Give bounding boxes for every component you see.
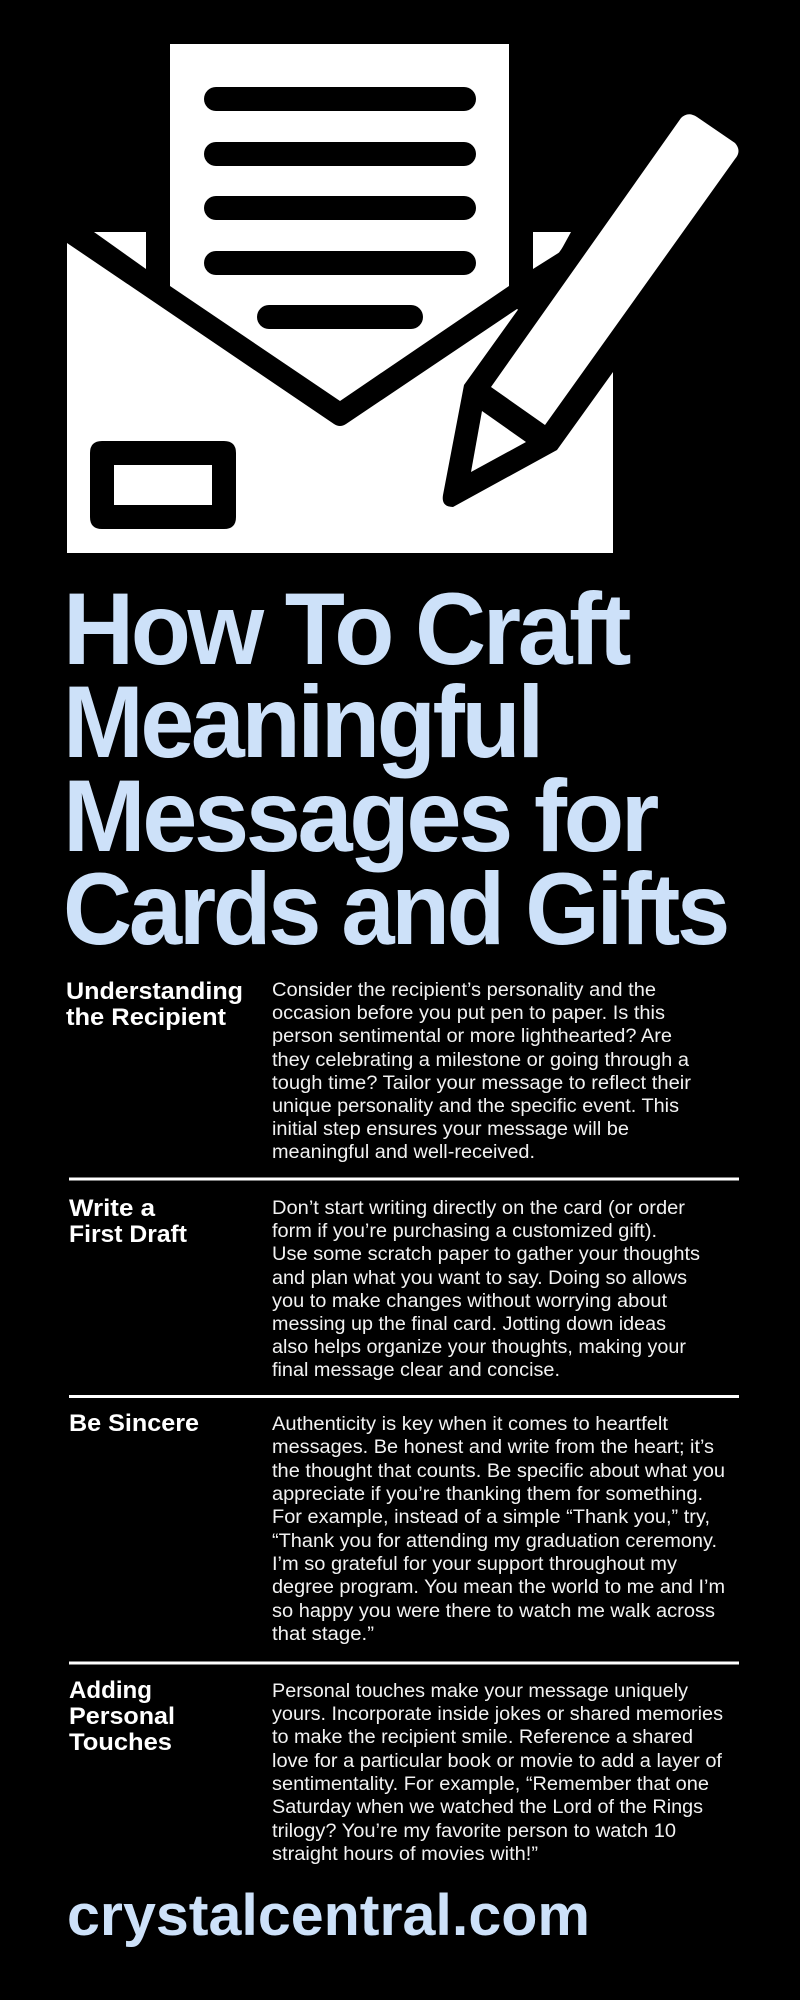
text block: first draft: also helps organize your thoughts, making your [272, 1337, 687, 1358]
address label on envelope [90, 441, 236, 529]
text block: recipient: meaningful and well-received. [272, 1142, 535, 1163]
text block: sincere: so happy you were there to watch me walk across [272, 1601, 715, 1622]
text block: recipient: person sentimental or more lighthearted? Are [272, 1026, 672, 1047]
envelope right flap corner [533, 232, 571, 269]
title: Meaningful [63, 665, 541, 779]
text block: first draft: Don’t start writing directly on the card (or order [272, 1198, 686, 1219]
heading: Write a First Draft [69, 1195, 187, 1248]
text block: first draft: form if you’re purchasing a customized gift). [272, 1221, 657, 1242]
title: How To Craft [63, 572, 630, 686]
text block: personal touches: love for a particular book or movie to add a layer of [272, 1751, 723, 1772]
heading: Be Sincere: Be Sincere [69, 1410, 199, 1437]
heading: Understanding the Recipient: Understanding [66, 978, 243, 1005]
text block: sincere: the thought that counts. Be specific about what you [272, 1461, 725, 1482]
pen outline [443, 70, 790, 507]
section: Write a First Draft [69, 1195, 700, 1381]
text block: recipient: Consider the recipient’s personality and the [272, 980, 656, 1001]
text block: recipient: unique personality and the specific event. This [272, 1096, 679, 1117]
text block: sincere: appreciate if you’re thanking them for something. [272, 1484, 703, 1505]
text block: personal touches [272, 1681, 723, 1865]
section: Adding Personal Touches [69, 1677, 723, 1865]
text block: recipient: they celebrating a milestone or going through a [272, 1050, 689, 1071]
text block: sincere: that stage.” [272, 1624, 374, 1645]
title: Cards and Gifts [63, 852, 727, 966]
text block: sincere: Authenticity is key when it comes to heartfelt [272, 1414, 669, 1435]
text block: first draft: you to make changes without worrying about [272, 1291, 668, 1312]
section: Understanding the Recipient [66, 978, 692, 1163]
text block: sincere: degree program. You mean the world to me and I’m [272, 1577, 725, 1598]
text block: first draft [272, 1198, 700, 1381]
text block: sincere: I’m so grateful for your support throughout my [272, 1554, 678, 1575]
heading: Adding Personal Touches: Personal [69, 1703, 175, 1730]
section: Be Sincere [69, 1410, 725, 1645]
envelope body [67, 243, 613, 553]
heading: Understanding the Recipient: the Recipient [66, 1004, 226, 1031]
website url: crystalcentral.com [67, 1883, 590, 1948]
icon: envelope with letter and pen [67, 44, 790, 553]
text block: personal touches: trilogy? You’re my favorite person to watch 10 [272, 1821, 676, 1842]
text block: recipient: tough time? Tailor your message to reflect their [272, 1073, 692, 1094]
text block: personal touches: to make the recipient smile. Reference a shared [272, 1727, 693, 1748]
text block: first draft: final message clear and concise. [272, 1360, 560, 1381]
pen body [491, 114, 738, 425]
text block: personal touches: straight hours of movies with!” [272, 1844, 538, 1865]
heading: Adding Personal Touches: Touches [69, 1729, 172, 1756]
text block: sincere: “Thank you for attending my graduation ceremony. [272, 1531, 717, 1552]
heading: Understanding the Recipient [66, 978, 243, 1031]
text block: personal touches: sentimentality. For example, “Remember that one [272, 1774, 709, 1795]
text block: sincere [272, 1414, 725, 1645]
heading: Adding Personal Touches [69, 1677, 175, 1756]
text block: personal touches: Personal touches make your message uniquely [272, 1681, 689, 1702]
title: Messages for [63, 759, 659, 873]
text block: sincere: For example, instead of a simple “Thank you,” try, [272, 1507, 710, 1528]
heading: Write a First Draft: First Draft [69, 1221, 187, 1248]
letter text lines [204, 87, 476, 329]
text block: personal touches: Saturday when we watched the Lord of the Rings [272, 1797, 703, 1818]
heading: Adding Personal Touches: Adding [69, 1677, 152, 1704]
text block: first draft: messing up the final card. Jotting down ideas [272, 1314, 666, 1335]
heading: Write a First Draft: Write a [69, 1195, 156, 1222]
text block: recipient [272, 980, 692, 1163]
text block: personal touches: yours. Incorporate inside jokes or shared memories [272, 1704, 723, 1725]
title [63, 572, 727, 966]
text block: sincere: messages. Be honest and write from the heart; it’s [272, 1437, 714, 1458]
envelope left flap corner [94, 232, 146, 269]
text block: first draft: Use some scratch paper to gather your thoughts [272, 1244, 700, 1265]
letter paper [170, 44, 509, 401]
text block: recipient: initial step ensures your message will be [272, 1119, 629, 1140]
text block: first draft: and plan what you want to say. Doing so allows [272, 1268, 687, 1289]
text block: recipient: occasion before you put pen to paper. Is this [272, 1003, 665, 1024]
pen nib [471, 411, 526, 472]
